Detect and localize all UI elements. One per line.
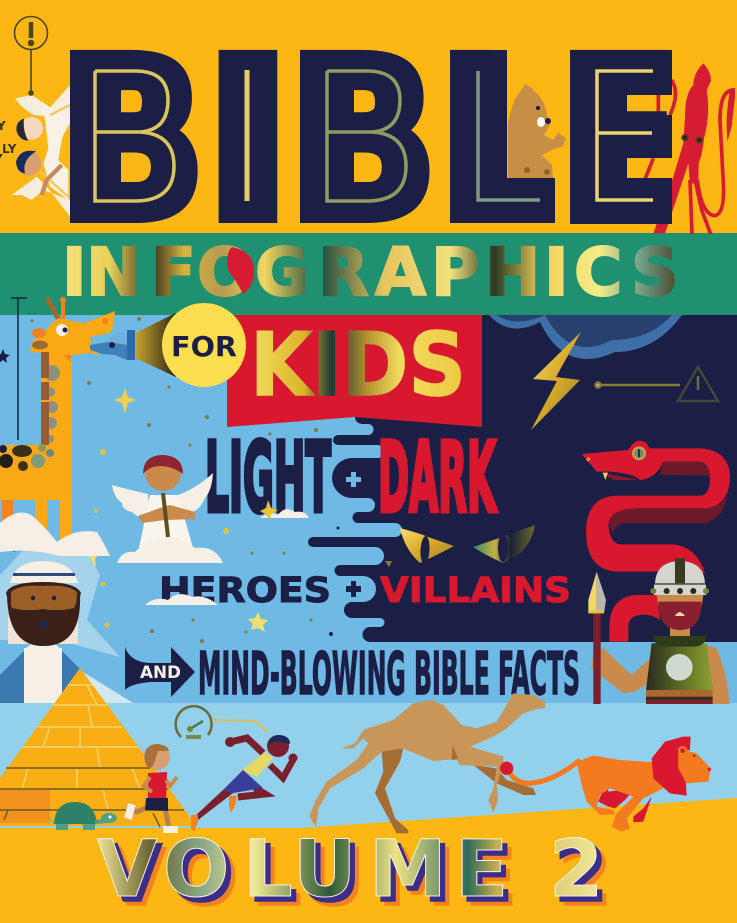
icon: warning triangle on line <box>596 367 718 401</box>
cat eyes <box>400 525 535 564</box>
clouds on the left <box>0 513 110 556</box>
panel: dark night side with wavy edge <box>308 315 737 642</box>
pyramid <box>0 668 196 827</box>
heading: VILLAINS: VILLAINS <box>380 571 571 611</box>
title: VOLUME 2: VOLUME 2 <box>102 830 608 920</box>
icon: speedometer <box>176 706 268 739</box>
icon: red shape in the letter O <box>227 247 254 294</box>
small stars and dots <box>12 317 392 645</box>
small cloud under HEROES <box>145 594 218 605</box>
fragment of angel text <box>0 119 17 166</box>
icon: lightning bolt <box>531 332 581 430</box>
plus sign heroes and villains <box>346 581 361 597</box>
icon: flashlight <box>90 313 176 377</box>
red banner <box>227 315 482 427</box>
soldier with spear <box>588 558 729 704</box>
sprinter <box>191 735 298 832</box>
title: BIBLE: E <box>560 13 680 270</box>
small cloud with star near LIGHT <box>260 500 309 520</box>
camel <box>309 693 545 833</box>
text: DARK <box>378 422 497 534</box>
plus sign light and dark <box>346 472 361 487</box>
title: BIBLE: I <box>203 13 293 270</box>
title: KIDS: KIDS <box>250 314 466 416</box>
panel: pale blue lower sky <box>0 703 737 828</box>
icon: turtle <box>47 802 117 830</box>
title: BIBLE: B <box>59 13 206 270</box>
green band <box>0 233 737 317</box>
title: VOLUME 2: VOLUME 2 <box>97 825 603 915</box>
red serpent <box>582 441 730 642</box>
panel: yellow ground <box>0 798 737 923</box>
lion <box>500 737 711 832</box>
FOR badge <box>162 303 246 387</box>
panel: light blue upper field <box>0 315 737 704</box>
title: BIBLE: B <box>288 13 438 270</box>
text: LIGHT <box>205 422 331 534</box>
icon: red squid <box>644 63 735 234</box>
storm cloud <box>489 315 682 359</box>
giraffe <box>0 297 115 540</box>
measuring line at left <box>11 298 27 440</box>
upside-down angels <box>12 85 70 217</box>
title: VOLUME 2: VOLUME 2 <box>106 834 612 923</box>
BIBLE gold inline strokes <box>95 70 653 201</box>
title: BIBLE <box>59 13 680 270</box>
title: BIBLE: L <box>440 13 552 270</box>
callout arrow: AND <box>125 647 195 697</box>
callout arrow: AND: AND <box>140 663 181 683</box>
bearded man in turban <box>0 561 88 703</box>
angel playing pipe <box>112 455 223 563</box>
heading: HEROES: HEROES <box>159 571 331 611</box>
boy running <box>124 744 178 833</box>
FOR badge: FOR <box>171 330 237 363</box>
BIBLE letter weight reinforcement <box>70 50 672 224</box>
fragment of angel text: LY <box>2 142 17 156</box>
star at left edge <box>0 349 10 363</box>
title: INFOGRAPHICS: INFOGRAPHICS <box>62 234 679 311</box>
rays of light around man <box>0 548 133 703</box>
icon: bear <box>508 84 566 178</box>
icon: exclamation mark on string <box>14 16 48 95</box>
